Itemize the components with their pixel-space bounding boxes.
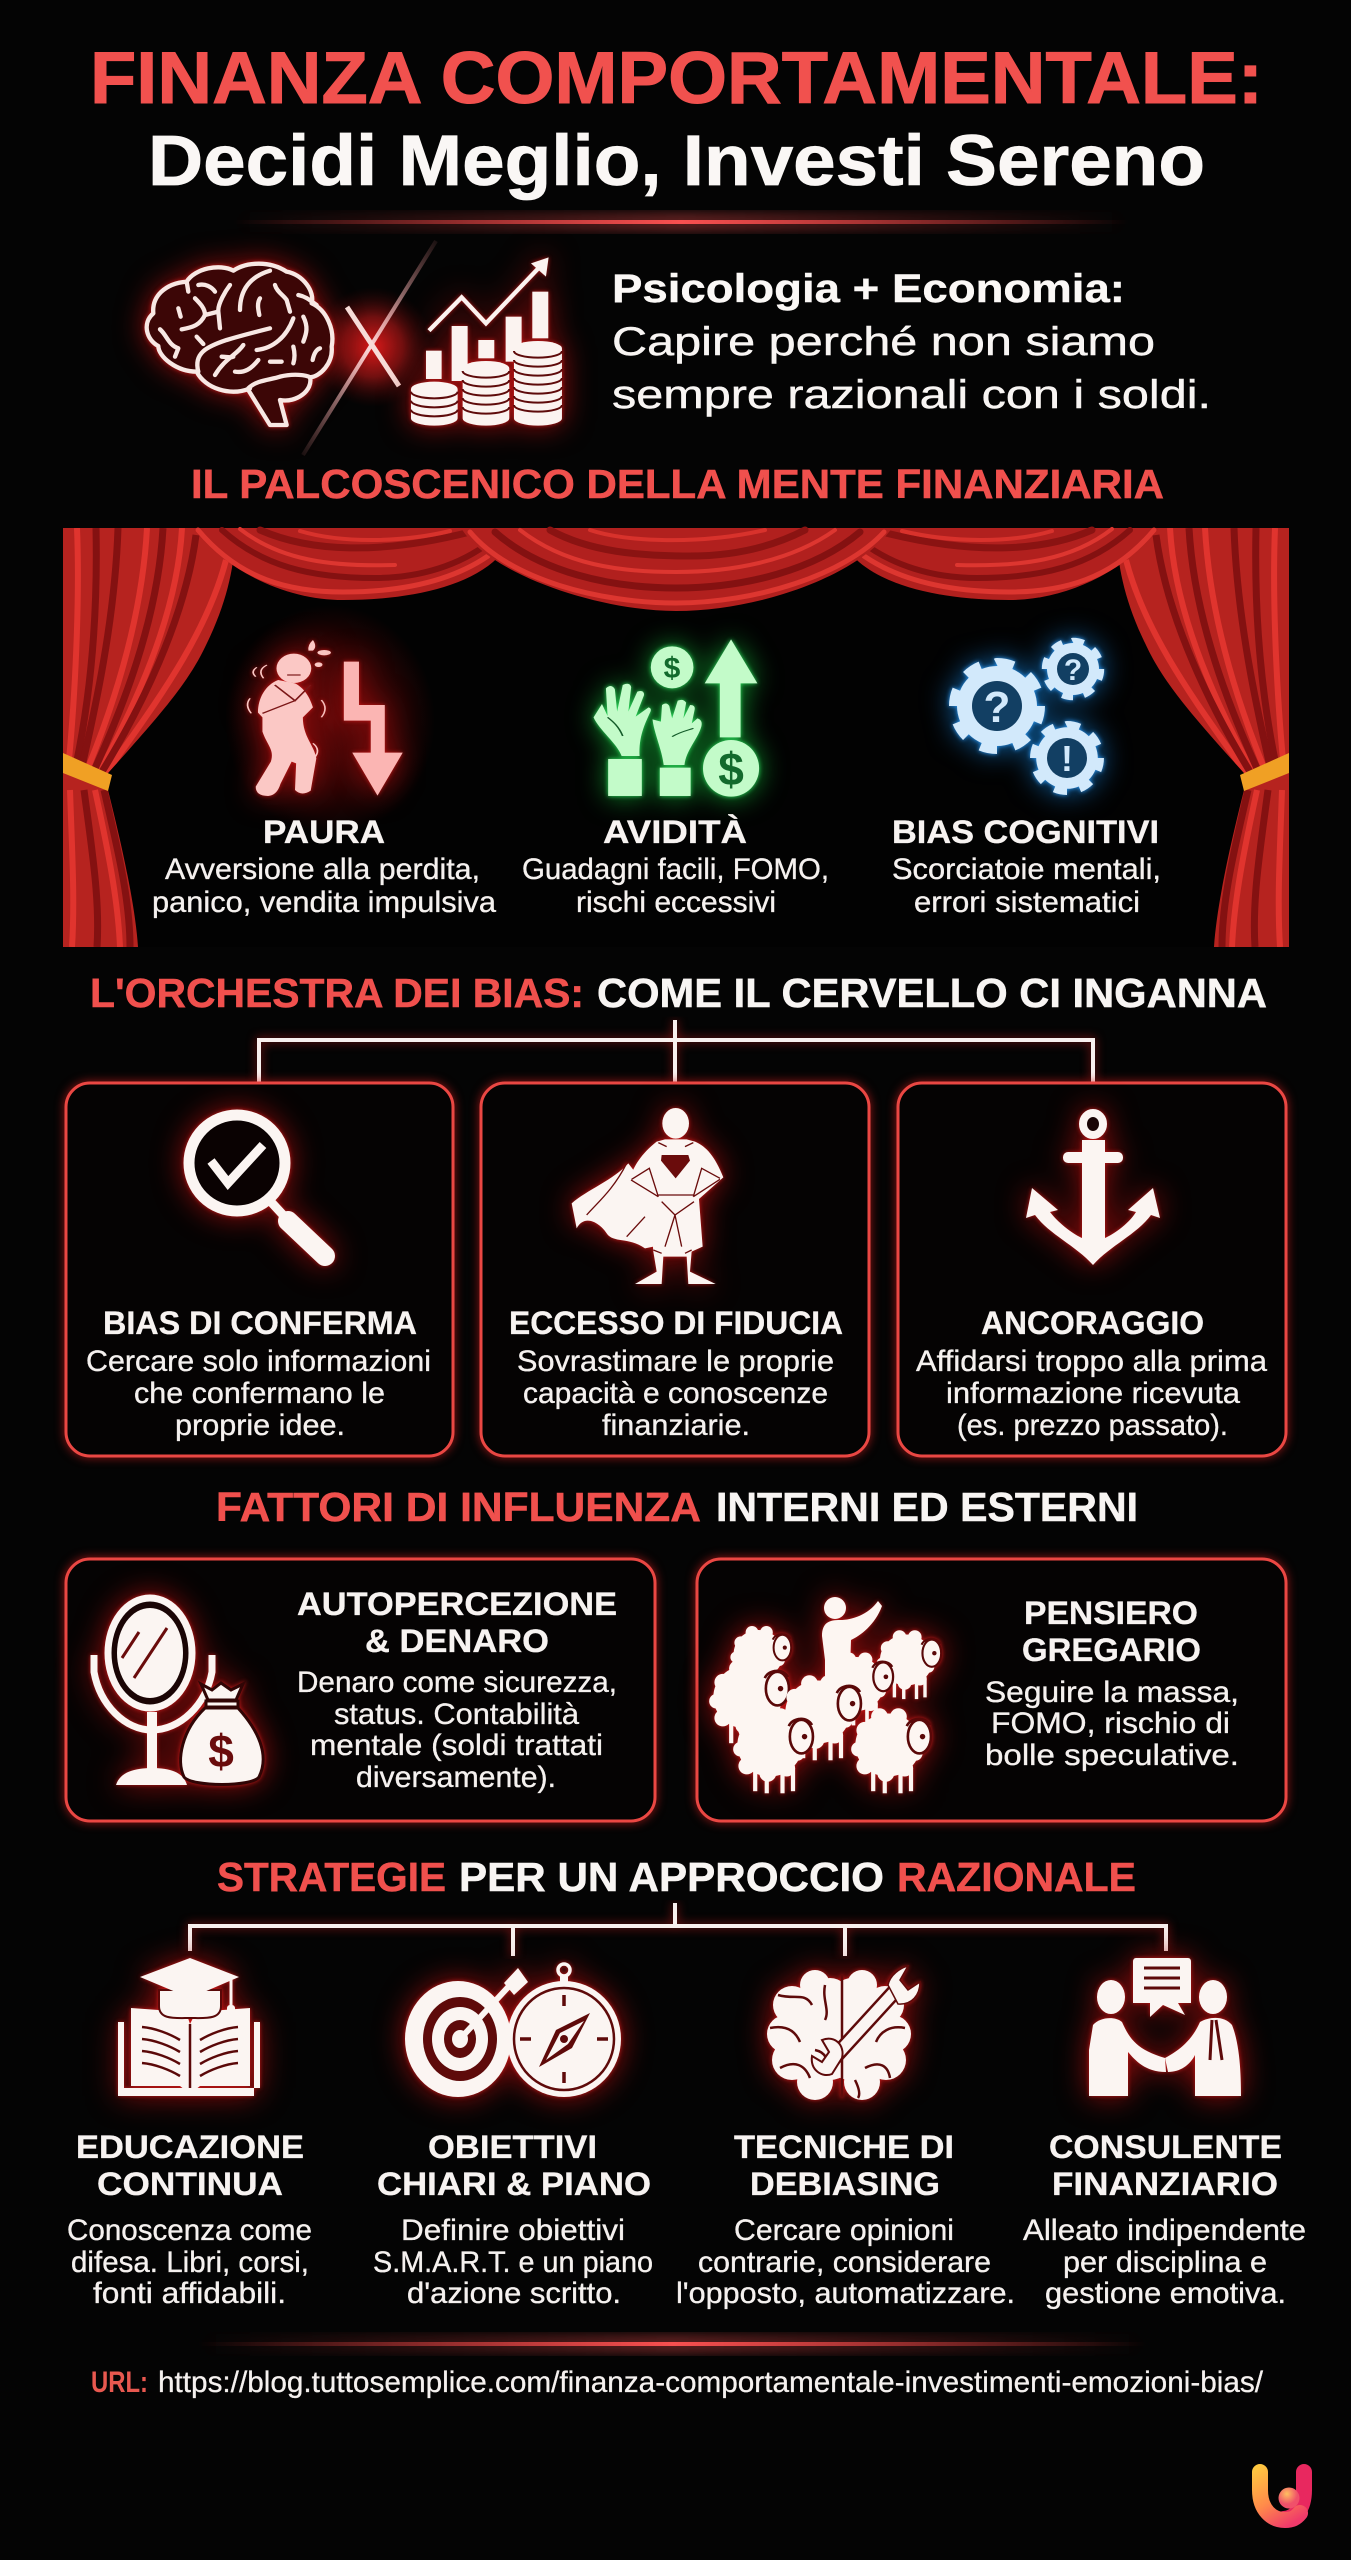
heading: orchestra: COME IL CERVELLO CI INGANNA: [597, 970, 1267, 1016]
curtain left: [63, 528, 235, 947]
divider bottom: [198, 2334, 1147, 2354]
icon: target and compass: [405, 1964, 621, 2097]
icon: X glow: [313, 287, 433, 407]
text: ancoraggio: informazione ricevuta: [946, 1377, 1240, 1410]
icon: fear: [225, 605, 435, 835]
text: eccesso di fiducia: Sovrastimare le proprie: [517, 1345, 834, 1378]
heading: strategie: RAZIONALE: [897, 1854, 1136, 1900]
coin stacks: [411, 341, 562, 426]
icon: brain with wrench: [767, 1966, 920, 2100]
text: bias cognitivi: errori sistematici: [914, 886, 1140, 919]
text: autopercezione: mentale (soldi trattati: [310, 1729, 603, 1762]
text: debiasing: Cercare opinioni: [734, 2214, 954, 2247]
text: paura: panico, vendita impulsiva: [152, 886, 496, 919]
text: autopercezione: status. Contabilità: [334, 1698, 579, 1731]
text: ancoraggio: Affidarsi troppo alla prima: [916, 1345, 1267, 1378]
valance right: [822, 528, 1159, 600]
text: debiasing: l'opposto, automatizzare.: [676, 2277, 1015, 2310]
icon: hero: [572, 1108, 723, 1284]
icon: cognitive gears: !: [1061, 738, 1073, 779]
greed coin symbols: $: [718, 743, 744, 795]
text: bias cognitivi: BIAS COGNITIVI: [892, 814, 1159, 850]
icon: brain, X and growth chart: [147, 241, 562, 455]
target: [405, 1968, 528, 2097]
curtain right: [1117, 528, 1289, 947]
heading: strategie: [217, 1854, 1136, 1900]
mirror: [94, 1598, 212, 1785]
source URL: https://blog.tuttosemplice.com/finanza-comportamentale-investimenti-emozioni-bias/: [158, 2366, 1264, 2399]
text: debiasing: TECNICHE DI: [734, 2129, 954, 2165]
icon: anchor: [1026, 1113, 1160, 1265]
column: educazione: [67, 1958, 312, 2310]
title: Decidi Meglio, Investi Sereno: [148, 122, 1205, 201]
text: bias di conferma: Cercare solo informazioni: [86, 1345, 431, 1378]
title: [90, 38, 1263, 201]
panel: ancoraggio: [898, 1083, 1286, 1456]
text: educazione: [67, 2129, 312, 2310]
heading: orchestra: L'ORCHESTRA DEI BIAS:: [90, 970, 584, 1016]
heading: orchestra: [90, 970, 1267, 1016]
valance centre: [461, 528, 892, 611]
text: paura: Avversione alla perdita,: [165, 853, 480, 886]
text: debiasing: DEBIASING: [750, 2166, 940, 2202]
text: autopercezione: diversamente).: [356, 1761, 556, 1794]
sheep: [709, 1626, 941, 1793]
text: obiettivi: S.M.A.R.T. e un piano: [373, 2246, 653, 2279]
money bag: [181, 1683, 263, 1784]
text: paura: [152, 814, 496, 919]
text: ancoraggio: [916, 1305, 1267, 1442]
text: bias di conferma: proprie idee.: [175, 1409, 345, 1442]
panel: bias di conferma: [66, 1083, 453, 1456]
text: eccesso di fiducia: ECCESSO DI FIDUCIA: [509, 1305, 843, 1341]
text: educazione: EDUCAZIONE: [76, 2129, 304, 2165]
text: pensiero gregario: Seguire la massa,: [985, 1676, 1239, 1709]
panel: stage: [63, 528, 1289, 947]
text: bias di conferma: che confermano le: [134, 1377, 385, 1410]
icon: chart and coins: [411, 257, 562, 426]
text: bias cognitivi: [892, 814, 1161, 919]
text: avidita: [522, 814, 829, 919]
icon: magnifier: [189, 1115, 325, 1256]
title: FINANZA COMPORTAMENTALE:: [90, 38, 1263, 119]
text: educazione: Conoscenza come: [67, 2214, 312, 2247]
divider top: [233, 212, 1129, 232]
text: educazione: difesa. Libri, corsi,: [71, 2246, 309, 2279]
text: paura: PAURA: [263, 814, 385, 850]
text: eccesso di fiducia: [509, 1305, 843, 1442]
connector: strategie: [190, 1903, 1166, 1956]
column: obiettivi: [373, 1964, 653, 2310]
greed coin symbols: [664, 652, 744, 795]
icon: flock of sheep with leader: [709, 1597, 941, 1793]
text: obiettivi: Definire obiettivi: [401, 2214, 625, 2247]
text: obiettivi: d'azione scritto.: [407, 2277, 621, 2310]
logo: [1260, 2472, 1304, 2520]
text: debiasing: [676, 2129, 1015, 2310]
intro text: sempre razionali con i soldi.: [612, 373, 1211, 417]
icon: greed: [594, 639, 759, 797]
panel: eccesso di fiducia: [481, 1083, 869, 1456]
text: educazione: CONTINUA: [97, 2166, 283, 2202]
text: ancoraggio: ANCORAGGIO: [981, 1305, 1204, 1341]
text: consulente: per disciplina e: [1063, 2246, 1267, 2279]
valance left: [193, 528, 530, 600]
text: autopercezione: AUTOPERCEZIONE: [297, 1586, 617, 1622]
panel: autopercezione: [66, 1559, 655, 1821]
icon: cognitive gears: ?: [1064, 654, 1082, 687]
icon: slash: [303, 241, 436, 455]
icon: mirror and money bag: [94, 1598, 263, 1785]
column: consulente: [1023, 1958, 1306, 2310]
gear bottom: [1035, 726, 1099, 790]
text: pensiero gregario: FOMO, rischio di: [991, 1707, 1230, 1740]
text: educazione: fonti affidabili.: [93, 2277, 286, 2310]
icon: book and cap: [118, 1958, 260, 2096]
text: ancoraggio: (es. prezzo passato).: [957, 1409, 1228, 1442]
gear large: [956, 665, 1038, 747]
heading: fattori: [216, 1484, 1138, 1530]
greed coin symbols: $: [664, 652, 681, 685]
icon: cognitive gears: [956, 642, 1100, 790]
text: consulente: gestione emotiva.: [1045, 2277, 1286, 2310]
text: pensiero gregario: [985, 1595, 1239, 1772]
icon: cognitive gears: ?: [984, 683, 1010, 732]
heading: strategie: STRATEGIE: [217, 1854, 446, 1900]
text: autopercezione: [297, 1586, 617, 1794]
icon: advisors handshake: [1089, 1958, 1241, 2096]
text: pensiero gregario: bolle speculative.: [985, 1739, 1239, 1772]
text: debiasing: contrarie, considerare: [698, 2246, 991, 2279]
column: debiasing: [676, 1966, 1015, 2310]
intro text: Psicologia + Economia:: [612, 267, 1125, 311]
heading: strategie: PER UN APPROCCIO: [459, 1854, 884, 1900]
intro text: Capire perché non siamo: [612, 320, 1155, 364]
panel: pensiero gregario: [697, 1559, 1286, 1821]
source URL: URL:: [91, 2366, 148, 2399]
text: consulente: CONSULENTE: [1049, 2129, 1282, 2165]
text: autopercezione: Denaro come sicurezza,: [297, 1666, 617, 1699]
intro text: [612, 267, 1211, 417]
heading: fattori: FATTORI DI INFLUENZA: [216, 1484, 701, 1530]
text: autopercezione: & DENARO: [365, 1623, 549, 1659]
compass: [507, 1964, 621, 2097]
text: bias di conferma: [86, 1305, 431, 1442]
heading: fattori: INTERNI ED ESTERNI: [716, 1484, 1138, 1530]
text: obiettivi: OBIETTIVI: [428, 2129, 597, 2165]
text: avidita: AVIDITÀ: [603, 814, 747, 850]
text: bias cognitivi: Scorciatoie mentali,: [892, 853, 1161, 886]
connector: bias: [259, 1020, 1093, 1083]
text: consulente: [1023, 2129, 1306, 2310]
text: eccesso di fiducia: capacità e conoscenze: [523, 1377, 828, 1410]
icon: brain: [147, 264, 332, 425]
text: pensiero gregario: GREGARIO: [1022, 1632, 1201, 1668]
text: eccesso di fiducia: finanziarie.: [602, 1409, 750, 1442]
icon: down arrow: [344, 662, 403, 796]
heading: palcoscenico: IL PALCOSCENICO DELLA MENTE FINANZIARIA: [191, 461, 1164, 507]
gear top: [1046, 642, 1100, 696]
text: avidita: rischi eccessivi: [576, 886, 776, 919]
icon: X: [347, 307, 399, 386]
money bag symbol: $: [208, 1725, 234, 1777]
text: avidita: Guadagni facili, FOMO,: [522, 853, 829, 886]
text: consulente: FINANZIARIO: [1052, 2166, 1278, 2202]
text: obiettivi: CHIARI & PIANO: [377, 2166, 651, 2202]
text: consulente: Alleato indipendente: [1023, 2214, 1306, 2247]
text: bias di conferma: BIAS DI CONFERMA: [103, 1305, 417, 1341]
leader: [822, 1597, 882, 1700]
text: pensiero gregario: PENSIERO: [1024, 1595, 1198, 1631]
text: obiettivi: [373, 2129, 653, 2310]
